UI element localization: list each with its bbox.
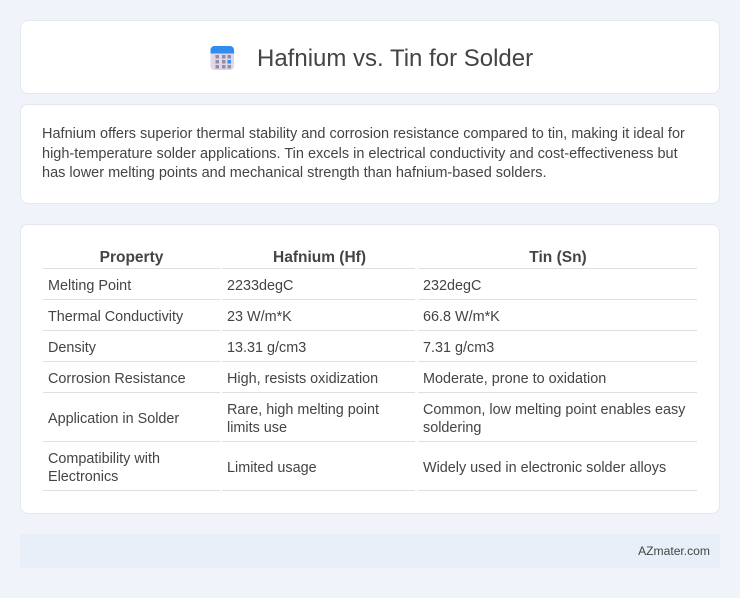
header panel: [20, 20, 720, 94]
row: thermal conductivity: 23 W/m*K: [227, 309, 292, 325]
row: density: Density: [48, 340, 96, 356]
row: corrosion resistance: Corrosion Resistance: [48, 371, 186, 387]
icon: calendar: [210, 46, 234, 70]
row: density: 7.31 g/cm3: [423, 340, 494, 356]
table header: [100, 249, 587, 266]
row: application in solder: Application in Solder: [48, 411, 179, 427]
table header: Property: [100, 249, 163, 266]
row: corrosion resistance: [48, 371, 606, 387]
row: density: [48, 340, 494, 356]
table header: Hafnium (Hf): [273, 249, 366, 266]
panel: comparison table: [20, 224, 720, 514]
row: application in solder: [48, 402, 686, 436]
row: thermal conductivity: Thermal Conductivity: [48, 309, 183, 325]
row: compatibility with electronics: Limited usage: [227, 460, 317, 476]
row: thermal conductivity: [48, 309, 500, 325]
summary text: Hafnium offers superior thermal stability and corrosion resistance compared to tin, making it ideal for high-temperature solder applications. Tin excels in electrical conductivity and cost-effectiveness but has lower melting points and mechanical strength than hafnium-based solders.: [42, 126, 685, 181]
row: thermal conductivity: 66.8 W/m*K: [423, 309, 500, 325]
table header: Tin (Sn): [529, 249, 587, 266]
row: compatibility with electronics: Compatibility with: [48, 451, 160, 467]
row: melting point: 2233degC: [227, 278, 293, 294]
row: melting point: Melting Point: [48, 278, 131, 294]
row: compatibility with electronics: [48, 451, 666, 485]
row: corrosion resistance: Moderate, prone to oxidation: [423, 371, 606, 387]
row: application in solder: Common, low melting point enables easy: [423, 402, 685, 418]
row: density: 13.31 g/cm3: [227, 340, 306, 356]
footer brand: AZmater.com: [638, 544, 710, 558]
footer bar: [20, 534, 720, 568]
row: application in solder: Rare, high melting point: [227, 402, 379, 418]
row: application in solder: soldering: [423, 420, 481, 436]
title: Hafnium vs. Tin for Solder: [257, 45, 533, 72]
row: compatibility with electronics: Widely used in electronic solder alloys: [423, 460, 666, 476]
row: compatibility with electronics: Electronics: [48, 469, 118, 485]
row: corrosion resistance: High, resists oxidization: [227, 371, 378, 387]
row: melting point: 232degC: [423, 278, 481, 294]
row: melting point: [48, 278, 481, 294]
row: application in solder: limits use: [227, 420, 287, 436]
panel: summary: [20, 104, 720, 204]
